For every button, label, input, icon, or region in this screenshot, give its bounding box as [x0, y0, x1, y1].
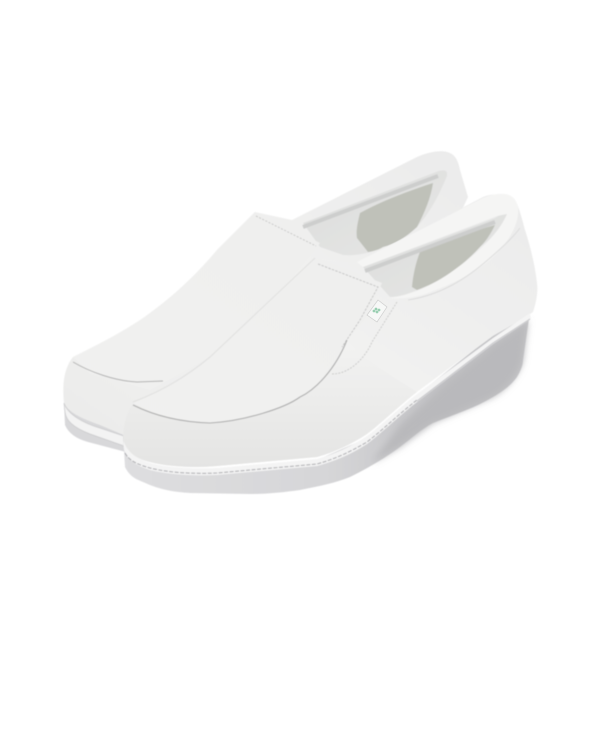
front shoe toe cap	[123, 340, 417, 467]
back shoe tongue	[73, 212, 320, 390]
back shoe lining	[303, 170, 447, 255]
front shoe midsole rim	[123, 313, 531, 475]
front shoe tongue	[133, 258, 382, 423]
back shoe (left)	[63, 151, 468, 452]
front shoe collar seam	[408, 228, 520, 300]
brand tag with green clover	[367, 300, 387, 322]
front shoe (right)	[123, 194, 537, 494]
front shoe collar shadow	[365, 222, 495, 271]
front shoe rim shadow	[417, 319, 530, 401]
back shoe sole	[64, 370, 160, 452]
back shoe insole	[357, 183, 433, 252]
back shoe collar shadow	[303, 176, 438, 227]
back shoe tongue seam	[256, 216, 316, 246]
front shoe tongue stitching	[318, 264, 378, 347]
front shoe heel shading	[372, 320, 528, 463]
front shoe lining	[363, 214, 507, 297]
shadow line between the two shoes	[133, 258, 315, 402]
front shoe welt stitching	[125, 400, 417, 473]
back shoe upper	[63, 151, 468, 436]
front shoe upper	[123, 195, 537, 467]
front shoe side gore stitching	[332, 302, 397, 374]
back shoe midsole rim	[64, 403, 124, 446]
front shoe apron seam	[133, 340, 347, 423]
back shoe apron seam	[73, 362, 163, 382]
front shoe collar roll	[357, 194, 518, 298]
front shoe sole wedge	[124, 312, 530, 494]
front shoe insole	[412, 225, 495, 290]
